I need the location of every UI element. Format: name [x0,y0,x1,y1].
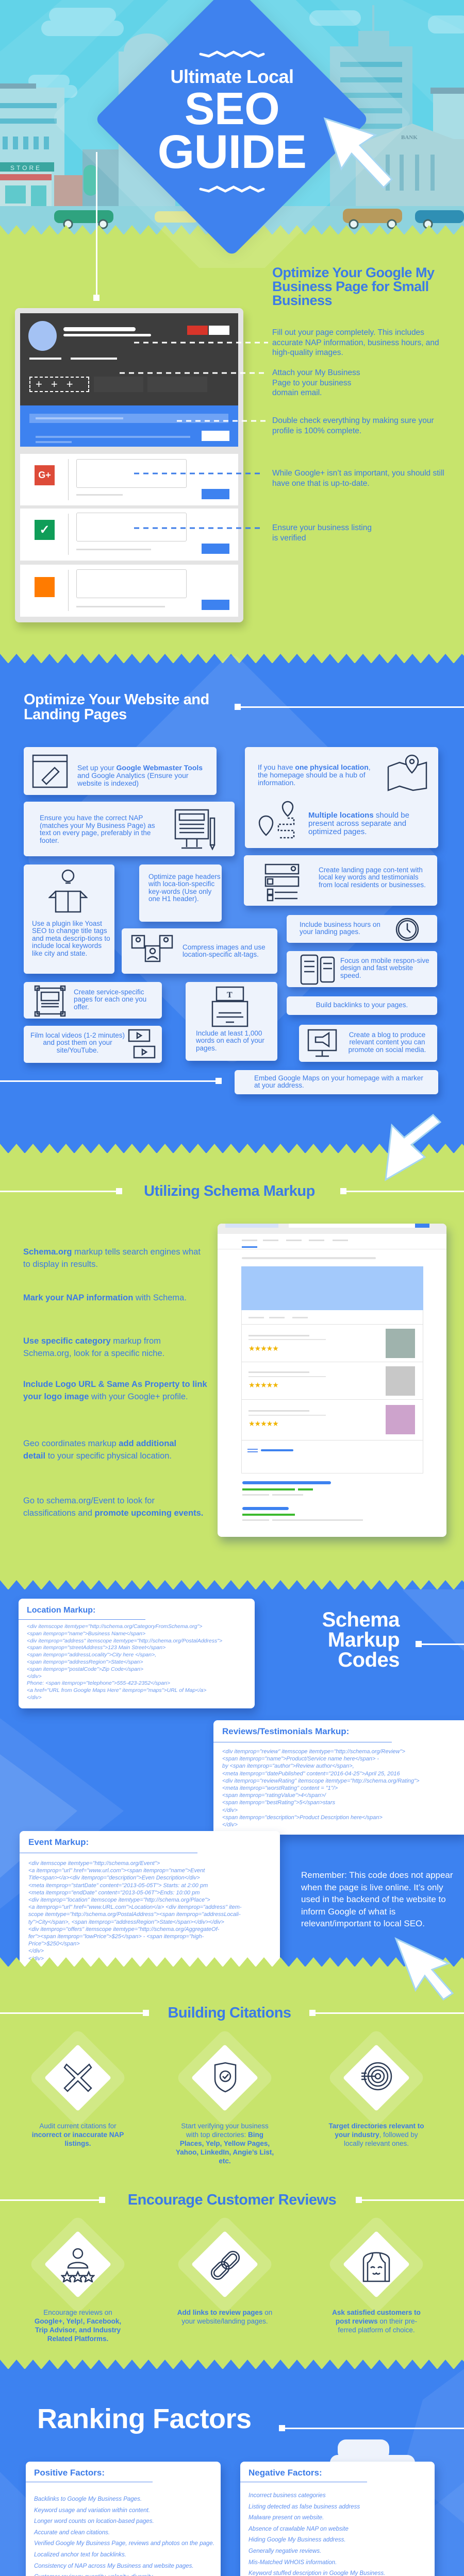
box: compress images: Compress images and use location-specific alt-tags. [183,943,266,958]
tip: attach: Attach your My Business Page to your business domain email. [272,368,360,397]
title text: GUIDE [158,126,306,178]
code box: event markup: scope itemtype="http://schema.org/PostalAddress"><span itemprop="addressLocali- [28,1911,241,1918]
code box: reviews markup: by <span itemprop="author">Review author</span>, [222,1763,354,1769]
code box: event markup: Event Markup: [28,1837,89,1847]
heading: optimize website: Optimize Your Website and Landing Pages [24,691,209,723]
dashed connector lines [120,342,268,529]
panel: negative factors [240,2462,435,2576]
panel: positive factors: Backlinks to Google My Business Pages. [34,2496,142,2502]
review item 2 [177,2217,272,2325]
result row 3 [242,1399,423,1440]
icon: clock [396,918,419,941]
review item 1 [31,2217,125,2343]
code box: location markup: Phone: <span itemprop="telephone">555-423-2352</span> [27,1680,170,1686]
box: compress images [122,928,277,974]
code box: location markup: <a href="URL from Google Maps Here" itemprop="maps">URL of Map</a> [27,1687,206,1693]
clouds ranking [330,2439,415,2462]
skyline illustration: BANK [401,134,418,141]
text: schema tips [23,1247,207,1518]
code box: reviews markup: </div> [222,1822,238,1828]
heading: building citations [0,2005,464,2021]
code box: location markup: <span itemprop="postalCode">Zip Code</span> [27,1666,143,1672]
code box: reviews markup: <span itemprop="name">Product/Service name here</span> - [222,1756,379,1762]
code box: event markup: <meta itemprop="startDate" content="2013-05-05T"> Starts: at 2:00 pm [28,1883,208,1889]
code box: location markup: <div itemprop="address" itemscope itemtype="http://schema.org/PostalAddress"> [27,1638,222,1644]
heading: building citations: Building Citations [168,2005,291,2021]
panel: negative factors: Absence of crawlable NAP on website [248,2526,349,2532]
mockup: google my business page: +++ [36,378,82,391]
box: backlinks: Build backlinks to your pages. [316,1001,408,1009]
blue section: website [0,663,464,1153]
text: remember note: Remember: This code does not appear when the page is live online. It’s only used in the backend of the website to inform Google of what is relevant/important to local SEO. [301,1870,453,1928]
citation item 3: Target directories relevant to your industry, followed by locally relevant ones. [328,2122,424,2147]
code box: event markup: <a itemprop="url" href="www.URL.com">Location</a> <div itemprop="address" item- [28,1904,242,1910]
heading: encourage customer reviews: Encourage Customer Reviews [128,2192,336,2208]
sky header section [0,0,464,237]
panel: negative factors: Generally negative reviews. [248,2548,321,2554]
title text: SEO [185,83,279,134]
green section: schema [0,1153,464,1589]
card: orange [20,565,238,617]
code box: reviews markup: <div itemprop="review" itemscope itemtype="http://schema.org/Review"> [222,1749,405,1755]
code box: event markup: <meta itemprop="endDate" content="2013-05-06T">Ends: 10:00 pm [28,1890,200,1896]
code box: event markup: </div> [28,1948,44,1954]
box: headers: Optimize page headers with loca-tion-specific key-words (Use only one H1 header). [148,873,221,903]
code box: event markup [20,1831,280,1973]
code box: event markup: <a itemprop="url" href="www.url.com"><span itemprop="name">Event [28,1868,205,1874]
card: verified: ✓ [39,523,50,537]
panel: positive factors: Consistency of NAP across My Business and website pages. [34,2563,194,2569]
code box: reviews markup: <span itemprop="ratingValue">4</span>/ [222,1792,326,1799]
heading: utilizing schema markup [0,1183,464,1199]
code box: reviews markup [213,1720,464,1835]
box: plugin [24,865,114,974]
blue section: schema codes [0,1589,464,1967]
icon: chain link [210,2250,240,2280]
box: landing page content [244,855,437,906]
code box: event markup: Price">$250</span> [28,1941,80,1947]
code box: reviews markup: <span itemprop="bestRating">5</span>stars [222,1800,335,1806]
icon: cursor arrow [324,117,393,189]
browser mock: search results [218,1224,446,1537]
heading: utilizing schema markup: Utilizing Schema Markup [144,1183,315,1199]
card: google plus: G+ [38,470,51,480]
box: blog: Create a blog to produce relevant content you can promote on social media. [349,1031,426,1054]
code box: event markup: </div> [28,1956,44,1962]
box: google maps [235,1070,438,1094]
icon: monitor with pencil [174,809,216,851]
box: mobile [287,951,437,987]
review item 3: Ask satisfied customers to post reviews on their pre-ferred platform of choice. [332,2309,421,2334]
icon: image pins [131,935,173,962]
code box: location markup: <span itemprop="addressLocality">City here </span>, [27,1652,156,1658]
icon: frame [34,985,66,1017]
heading: schema markup codes: Schema Markup Codes [322,1608,400,1671]
result row 1: ★★★★★ [248,1344,278,1352]
panel: negative factors: Mis-Matched WHOIS information. [248,2560,337,2566]
panel: positive factors: Keyword usage and variation within content. [34,2507,150,2514]
panel: negative factors: Hiding Google My Business address. [248,2537,346,2543]
tip: verified: Ensure your business listing is verified [272,523,372,542]
box: 1000 words [186,982,277,1061]
text: schema tips: Mark your NAP information with Schema. [23,1293,187,1302]
box: one location / multiple [245,747,438,848]
text: schema tips: Use specific category markup from Schema.org, look for a specific niche. [23,1336,164,1358]
code box: event markup: <div itemscope itemtype="http://schema.org/Event"> [28,1860,160,1867]
tip: double check: Double check everything by making sure your profile is 100% complete. [272,416,434,435]
box: business hours: Include business hours on your landing pages. [300,921,380,936]
icon: map pin [388,754,427,791]
panel: negative factors: Malware present on website. [248,2515,324,2521]
review item 1: Encourage reviews on Google+, Yelp!, Facebook, Trip Advisor, and Industry Related Platforms. [35,2309,121,2343]
skyline illustration [0,0,464,234]
heading: ranking factors: Ranking Factors [37,2403,252,2434]
box: webmaster tools: Set up your Google Webmaster Tools and Google Analytics (Ensure your website is indexed) [77,764,203,787]
icon: search results list [265,863,299,902]
code box: event markup: fer"><span itemprop="lowPrice">$25</span> - <span itemprop="high- [28,1934,204,1940]
code box: location markup: Location Markup: [27,1606,95,1615]
heading: encourage customer reviews [0,2192,464,2208]
tip: fill out: Fill out your page completely. This includes accurate NAP information, business hours, and high-quality images. [272,328,439,357]
icon: X [63,2063,92,2092]
text: schema tips: Geo coordinates markup add additional detail to your specific physical location. [23,1439,176,1461]
box: service pages [24,982,162,1019]
icon: phones [300,954,335,985]
blue section: ranking factors [0,2369,464,2576]
citation item 2 [176,2031,274,2165]
icon: box with bulb [48,870,88,913]
code box: reviews markup: Reviews/Testimonials Markup: [222,1726,349,1736]
icon: typewriter: T [227,991,233,999]
tip: google plus: While Google+ isn’t as important, you should still have one that is up-to-date. [272,469,444,487]
code box: event markup: <div itemprop="offers" itemscope itemtype="http://schema.org/AggregateOf- [28,1926,219,1933]
card: verified [20,509,238,561]
box: NAP: Ensure you have the correct NAP (matches your My Business Page) as text on every page, preferably in the footer. [40,814,155,844]
code box: location markup: </div> [27,1673,42,1680]
icon: cursor arrow pointing down [385,1114,441,1181]
panel: positive factors: Accurate and clean citations. [34,2530,110,2536]
panel: negative factors: Incorrect business categories [248,2493,326,2499]
green section: citations & reviews [0,1967,464,2369]
result row 2 [242,1362,423,1399]
box: blog [299,1025,437,1062]
text: schema tips: Include Logo URL & Same As Property to link your logo image with your Google+ profile. [23,1380,207,1401]
title text: Ultimate Local [170,66,294,87]
card: google plus [20,454,238,505]
green section: google my business [0,234,464,663]
icon: monitor megaphone [307,1029,337,1057]
citation item 2: Start verifying your business with top directories: Bing Places, Yelp, Yellow Pages, Yahoo, LinkedIn, Angie’s List, etc. [176,2122,274,2165]
icon: person stars [61,2248,95,2282]
code box: reviews markup: <div itemprop="reviewRating" itemscope itemtype="http://schema.org/Rating"> [222,1778,419,1784]
code box: reviews markup: <meta itemprop="datePublished" content="2016-04-25">April 25, 2016 [222,1771,400,1777]
box: headers [139,865,222,922]
panel: negative factors: Negative Factors: [248,2468,322,2478]
text: schema tips: Go to schema.org/Event to look for classifications and promote upcoming events. [23,1496,203,1518]
code box: location markup: <div itemscope itemtype="http://schema.org/CategoryFromSchema.org"> [27,1623,202,1630]
skyline illustration: STORE [10,164,42,172]
box: webmaster tools [24,747,217,795]
panel: positive factors: Localized anchor text for backlinks. [34,2552,126,2558]
heading: optimize google my business: Optimize Your Google My Business Page for Small Business [272,265,435,308]
box: one location / multiple: Multiple locations should be present across separate and optimized pages. [308,811,409,836]
icon: video players [128,1029,156,1058]
text: gmb tips [272,328,444,542]
box: videos: Film local videos (1-2 minutes) and post them on your site/YouTube. [30,1031,125,1054]
citation item 3 [328,2031,424,2147]
code box: location markup: <span itemprop="name">Business Name</span> [27,1631,145,1637]
panel: positive factors [26,2462,221,2576]
title text [158,50,306,193]
box: business hours [287,915,437,943]
panel: positive factors: Longer word counts on location-based pages. [34,2518,154,2524]
code box: event markup: Title<span></a><div itemprop="description">Even Description</div> [28,1875,200,1881]
icon: multiple locations [259,801,295,839]
text: schema tips: Schema.org markup tells search engines what to display in results. [23,1247,201,1269]
icon: target [361,2062,392,2091]
code box: reviews markup: <span itemprop="description">Product Description here</span> [222,1815,383,1821]
box: google maps: Embed Google Maps on your homepage with a marker at your address. [254,1074,423,1089]
result row 3: ★★★★★ [248,1419,278,1428]
code box: event markup: <div itemprop="location" itemscope itemtype="http://schema.org/Place"> [28,1897,210,1903]
box: one location / multiple: If you have one physical location, the homepage should be a hub of information. [258,763,371,787]
code box: event markup: ty">City</span>, <span itemprop="addressRegion">State</span></div></div> [28,1919,224,1925]
panel: positive factors: Positive Factors: [34,2468,105,2478]
box: landing page content: Create landing page con-tent with local key words and testimonials from local residents or businesses. [319,866,426,889]
icon: happy face [363,2252,390,2282]
box: plugin: Use a plugin like Yoast SEO to change title tags and meta descrip-tions to include local keywords like city and state. [32,920,110,957]
box: videos [24,1026,162,1063]
icon: shield check [214,2062,236,2093]
code box: reviews markup: <meta itemprop="worstRating" content = "1"/> [222,1785,338,1791]
box: NAP [24,802,235,856]
box: 1000 words: Include at least 1,000 words on each of your pages. [196,1029,264,1052]
result row 2: ★★★★★ [248,1381,278,1389]
panel: negative factors: Listing detected as false business address [248,2504,360,2510]
icon: typewriter [211,986,248,1027]
result row 1 [242,1324,423,1361]
review item 2: Add links to review pages on your website/landing pages. [177,2309,272,2325]
icon: browser tools [32,754,68,788]
code box: location markup [19,1599,255,1708]
code box: reviews markup: </div> [222,1807,238,1814]
code box: location markup: </div> [27,1694,42,1701]
review item 3 [330,2217,423,2334]
box: service pages: Create service-specific pages for each one you offer. [74,988,146,1011]
panel: positive factors: Verified Google My Business Page, reviews and photos on the page. [34,2540,214,2547]
mockup: google my business page [15,308,243,622]
citation item 1 [31,2031,125,2147]
title diamond [54,0,410,268]
icon: cursor arrow [394,1937,454,2001]
connector line from title to mockup [96,152,97,299]
citation item 1: Audit current citations for incorrect or inaccurate NAP listings. [32,2122,124,2147]
box: mobile: Focus on mobile respon-sive design and fast website speed. [340,957,429,979]
code box: location markup: <span itemprop="addressRegion">State</span> [27,1659,143,1665]
box: backlinks [287,996,437,1015]
code box: location markup: <span itemprop="streetAddress">123 Main Street</span> [27,1645,165,1651]
